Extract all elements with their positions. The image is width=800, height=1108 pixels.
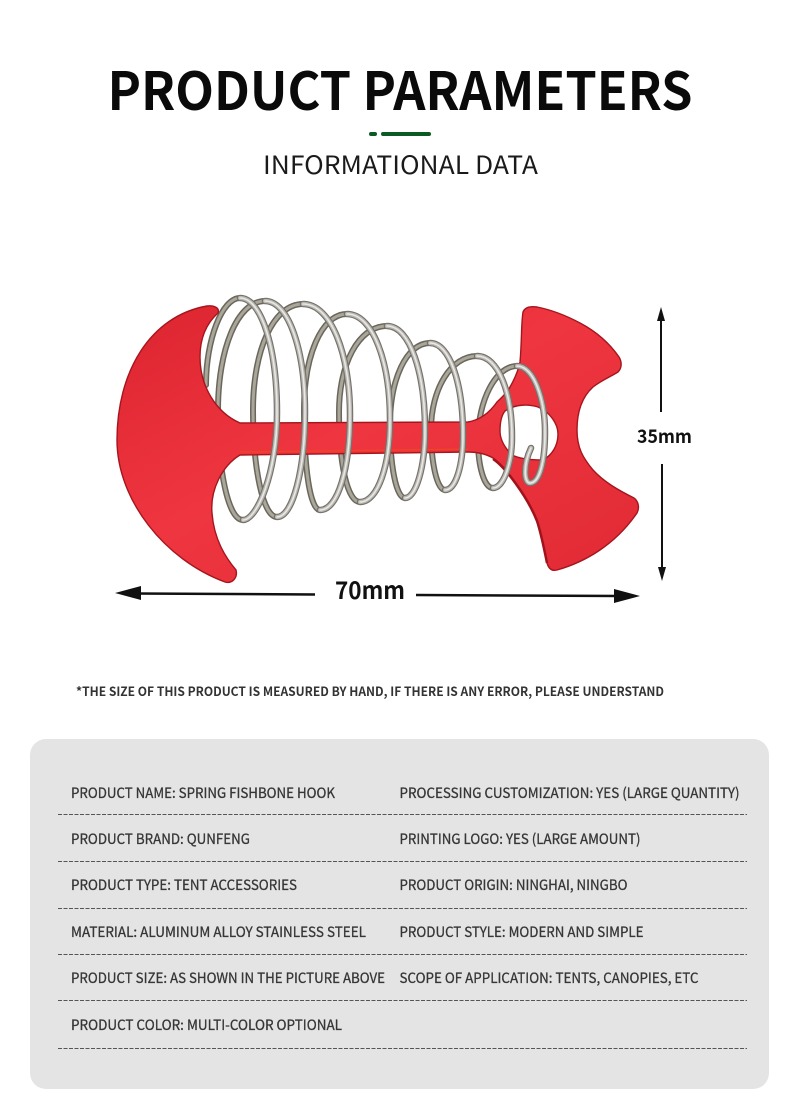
- row 3: [58, 875, 747, 908]
- width arrow right: [416, 589, 640, 603]
- row 6: PRODUCT COLOR: MULTI-COLOR OPTIONAL: [71, 1015, 342, 1035]
- width arrow left: [115, 586, 315, 600]
- measurement note: *THE SIZE OF THIS PRODUCT IS MEASURED BY HAND, IF THERE IS ANY ERROR, PLEASE UNDERSTAND: [76, 681, 664, 700]
- row 2: PRINTING LOGO: YES (LARGE AMOUNT): [400, 829, 640, 849]
- row 3: PRODUCT ORIGIN: NINGHAI, NINGBO: [400, 875, 628, 895]
- height arrow up: [657, 307, 665, 412]
- subtitle: INFORMATIONAL DATA: [263, 146, 539, 182]
- row 5: SCOPE OF APPLICATION: TENTS, CANOPIES, ETC: [400, 968, 699, 988]
- bar edge highlight: [240, 449, 468, 452]
- row 1: [58, 783, 747, 814]
- height label: 35mm: [637, 422, 692, 449]
- row 3: PRODUCT TYPE: TENT ACCESSORIES: [71, 875, 297, 895]
- panel background: [30, 739, 769, 1089]
- row 1: PROCESSING CUSTOMIZATION: YES (LARGE QUANTITY): [400, 783, 740, 803]
- lower shadow edge of body: [493, 459, 547, 563]
- row 2: PRODUCT BRAND: QUNFENG: [71, 829, 250, 849]
- title: PRODUCT PARAMETERS: [108, 50, 692, 126]
- spring front coils: [240, 298, 545, 520]
- row 1: PRODUCT NAME: SPRING FISHBONE HOOK: [71, 783, 335, 803]
- row 4: MATERIAL: ALUMINUM ALLOY STAINLESS STEEL: [71, 922, 366, 942]
- spring back coils: [206, 298, 517, 520]
- row 4: [58, 922, 747, 954]
- row 5: [58, 968, 747, 1000]
- height arrow down: [658, 464, 666, 581]
- width label: 70mm: [335, 571, 405, 606]
- panel: product specifications: [30, 739, 769, 1089]
- red aluminium body: [117, 306, 638, 582]
- row 2: [58, 829, 747, 862]
- row 5: PRODUCT SIZE: AS SHOWN IN THE PICTURE ABOVE: [71, 968, 385, 988]
- product illustration: spring fishbone hook: [117, 298, 638, 582]
- title accent bar: [369, 132, 431, 136]
- row 4: PRODUCT STYLE: MODERN AND SIMPLE: [400, 922, 644, 942]
